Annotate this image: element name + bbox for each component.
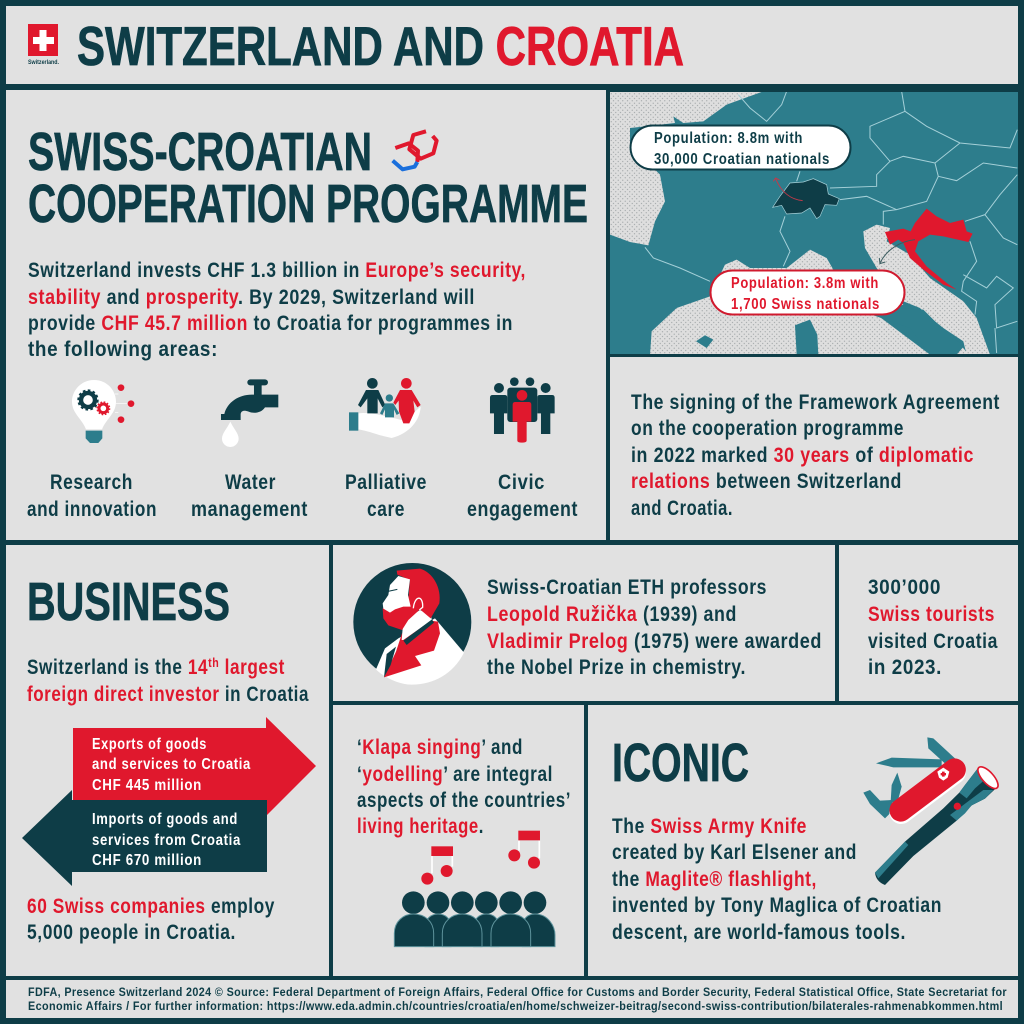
title: SWITZERLAND AND CROATIA (77, 15, 684, 77)
label: research and innovation (27, 471, 157, 521)
text: largest investor: Switzerland is the 14 (27, 656, 217, 679)
icon: choir (394, 891, 555, 947)
text: Nobel laureates: the Nobel Prize in chemistry. (487, 656, 746, 679)
icon: Swiss flag logo (28, 24, 59, 66)
icon: civic engagement group (490, 377, 555, 443)
text: framework agreement: in 2022 marked 30 years of diplomatic (631, 444, 974, 467)
callout: Croatia population: 1,700 Swiss nationals (731, 296, 880, 313)
label: water management: management (191, 498, 308, 521)
map: Europe (610, 91, 1017, 355)
text: tourists: 300’000 (868, 576, 941, 599)
panel: living heritage (333, 705, 584, 976)
text: investment intro: provide CHF 45.7 million to Croatia for programmes in (28, 312, 513, 335)
text: iconic tools: created by Karl Elsener and (612, 841, 857, 864)
panel: Nobel prize (333, 545, 835, 701)
arrow: imports: services from Croatia (92, 832, 241, 849)
text: Nobel laureates: Vladimir Prelog (1975) were awarded (487, 630, 822, 653)
label: water management: Water (225, 471, 276, 494)
text: iconic tools: invented by Tony Maglica of Croatian (612, 894, 942, 917)
text: investment intro: stability and prosperity. By 2029, Switzerland will (28, 286, 475, 309)
heading: cooperation programme: COOPERATION PROGRAMME (28, 174, 588, 234)
icon: Swiss Army knife (863, 737, 971, 829)
icon: linked hexagons (393, 131, 437, 169)
panel: header (6, 6, 1018, 84)
label: palliative care: Palliative (345, 471, 427, 494)
text: sources (28, 987, 1007, 1013)
text: heritage: ‘Klapa singing’ and (357, 736, 523, 759)
arrow: imports (22, 790, 267, 886)
text: framework agreement: on the cooperation programme (631, 417, 904, 440)
text: iconic tools: descent, are world-famous tools. (612, 921, 906, 944)
text: framework agreement: relations between Switzerland (631, 470, 902, 493)
heading: cooperation programme: SWISS-CROATIAN (28, 122, 372, 182)
panel: tourists (839, 545, 1018, 701)
icon: palliative care family in hand (349, 378, 421, 438)
text: Nobel laureates (487, 576, 822, 679)
text: largest investor (27, 655, 309, 706)
text: heritage: aspects of the countries’ (357, 789, 571, 812)
text: investment intro: Switzerland invests CHF 1.3 billion in Europe’s security, (28, 259, 526, 282)
label: civic engagement: Civic (498, 471, 545, 494)
icon: flashlight (875, 764, 1001, 885)
arrow: imports: Imports of goods and (92, 811, 238, 828)
arrow: imports: CHF 670 million (92, 852, 202, 869)
label: research and innovation: and innovation (27, 498, 157, 521)
text: Swiss companies: 5,000 people in Croatia. (27, 921, 236, 944)
map: Croatia (885, 209, 973, 290)
label: palliative care: care (367, 498, 405, 521)
text: iconic tools: The Swiss Army Knife (612, 815, 807, 838)
icon: Swiss flag logo: Switzerland. (28, 59, 59, 66)
arrow: Croatia to Italy (879, 240, 915, 264)
text: heritage: living heritage. (357, 815, 484, 838)
icon: portrait (353, 563, 471, 685)
text: tourists (868, 576, 998, 679)
icon: water tap (221, 379, 278, 447)
text: heritage: ‘yodelling’ are integral (357, 763, 553, 786)
panel: business (6, 545, 329, 976)
text: framework agreement (631, 391, 1000, 520)
callout: Croatia population: Population: 3.8m with (731, 275, 879, 292)
label: water management (191, 471, 308, 521)
text: investment intro: the following areas: (28, 338, 218, 361)
text: Swiss companies: 60 Swiss companies employ (27, 895, 275, 918)
text: iconic tools (612, 815, 942, 944)
text: Swiss companies (27, 895, 275, 944)
text: framework agreement: and Croatia. (631, 497, 733, 520)
panel: footer (6, 980, 1018, 1018)
callout: Switzerland population (630, 126, 850, 170)
label: palliative care (345, 471, 427, 521)
text: Nobel laureates: Leopold Ružička (1939) and (487, 603, 737, 626)
heading: cooperation programme (28, 122, 588, 234)
arrow: Switzerland to France (773, 178, 803, 201)
callout: Switzerland population: 30,000 Croatian nationals (654, 151, 830, 168)
panel: map (610, 91, 1018, 355)
text: investment intro (28, 259, 526, 361)
text: tourists: in 2023. (868, 656, 942, 679)
icon: research lightbulb (72, 380, 134, 443)
arrow: exports: CHF 445 million (92, 777, 202, 794)
heading: iconic: ICONIC (612, 733, 749, 793)
arrow: exports (73, 717, 316, 816)
label: civic engagement: engagement (467, 498, 578, 521)
text: largest investor: foreign direct investor in Croatia (27, 683, 309, 706)
map: Switzerland (773, 179, 839, 219)
panel: cooperation programme (6, 90, 606, 540)
callout: Croatia population (710, 270, 904, 314)
text: largest investor: largest (219, 656, 285, 679)
panel: iconic (588, 705, 1018, 976)
text: tourists: Swiss tourists (868, 603, 995, 626)
text: Nobel laureates: Swiss-Croatian ETH professors (487, 576, 767, 599)
label: research and innovation: Research (50, 471, 133, 494)
text: largest investor: th (208, 655, 219, 670)
arrow: exports: and services to Croatia (92, 756, 251, 773)
panel: framework agreement (610, 357, 1018, 540)
text: tourists: visited Croatia (868, 630, 998, 653)
callout: Switzerland population: Population: 8.8m with (654, 130, 803, 147)
text: iconic tools: the Maglite® flashlight, (612, 868, 817, 891)
text: heritage (357, 736, 571, 838)
arrow: exports: Exports of goods (92, 736, 207, 753)
heading: business: BUSINESS (27, 572, 230, 632)
label: civic engagement (467, 471, 578, 521)
icon: music notes (421, 831, 540, 885)
